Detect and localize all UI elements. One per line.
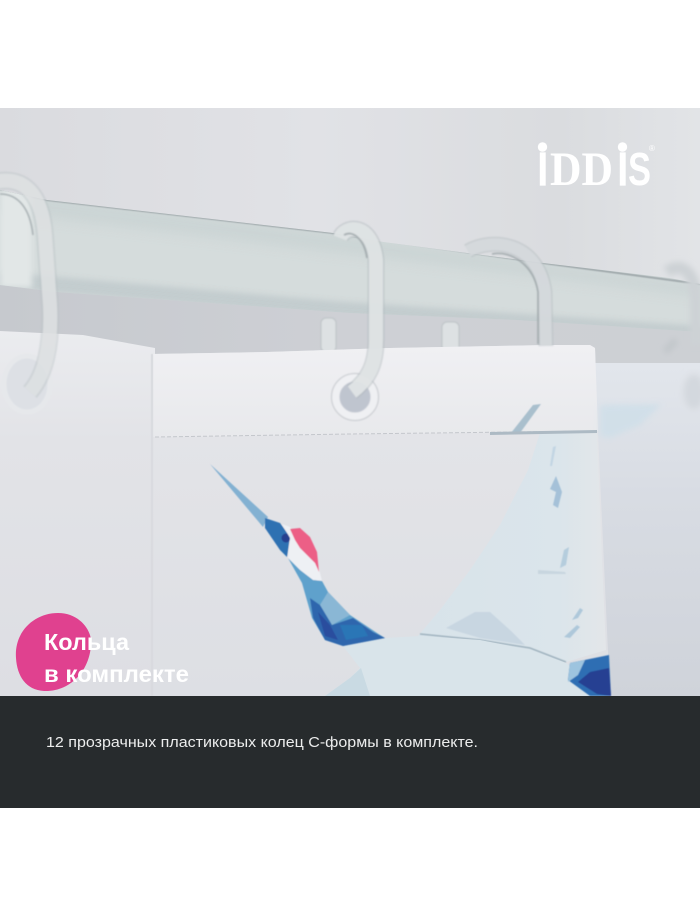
dark caption band [0, 696, 700, 808]
photo: curtain on rod with rings [0, 108, 700, 696]
bird body [448, 638, 566, 664]
bird head and neck [210, 464, 385, 646]
logo: IDDIS: ® [649, 144, 655, 153]
ring 2 center [332, 229, 378, 420]
pink blob [16, 613, 91, 691]
logo: IDDIS [538, 142, 655, 196]
rear ring stubs [322, 319, 458, 350]
ring 1 left [0, 181, 50, 412]
wall background [0, 108, 700, 284]
heading: Кольца в комплекте: Кольца [44, 629, 129, 655]
curtain rod [0, 190, 700, 330]
logo: IDDIS: I [538, 143, 548, 195]
logo: IDDIS: S [628, 143, 651, 195]
bird tail feathers [568, 655, 611, 696]
heading: Кольца в комплекте: в комплекте [44, 661, 189, 687]
ring 4 far right [665, 268, 700, 410]
ring 3 center right [468, 244, 546, 346]
rod shadow on wall [0, 285, 700, 363]
bird wing [418, 404, 606, 662]
back curtain wing trace [601, 405, 656, 436]
left curtain panel [0, 331, 155, 696]
back curtain right [590, 363, 700, 696]
front curtain panel [151, 345, 610, 696]
caption text: 12 прозрачных пластиковых колец С-формы в комплекте. [46, 734, 478, 751]
logo: IDDIS: I [618, 143, 628, 195]
lower body accent [325, 668, 370, 696]
logo: IDDIS: DD [550, 143, 613, 196]
